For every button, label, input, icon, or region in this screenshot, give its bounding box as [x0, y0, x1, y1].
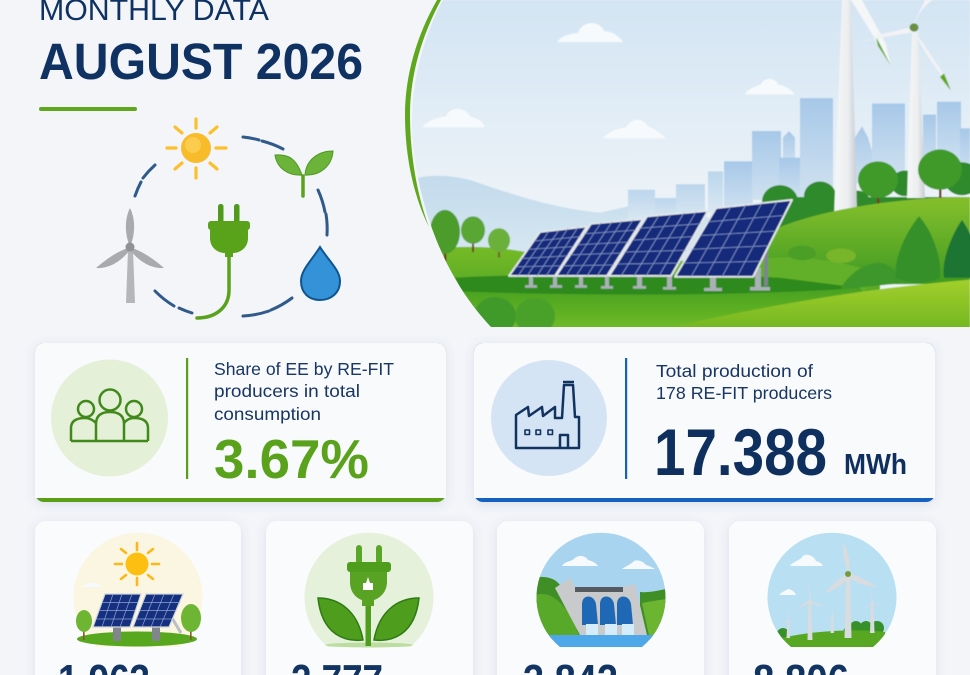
icon: factory on blue circle: [491, 360, 607, 476]
value: 17.388: [654, 415, 827, 489]
back tree band: [762, 162, 970, 234]
source card: wind: [729, 521, 936, 675]
card text: [656, 361, 832, 403]
ground shadow under panels: [455, 274, 860, 295]
middle meadow: [462, 288, 890, 328]
source card: hydro: [497, 521, 704, 675]
icon: solar panels: [74, 533, 203, 647]
card text: Total production of: [656, 361, 813, 381]
title: august 2026: AUGUST 2026: [39, 33, 363, 90]
card text: [214, 359, 394, 424]
clouds: [422, 23, 795, 138]
renewable energy cycle icon group: [96, 119, 340, 318]
icon: plug: [197, 204, 250, 318]
icon: sun: [167, 119, 226, 178]
front lime hill: [670, 280, 970, 328]
green arc edge: [405, 0, 441, 227]
sky: [412, 0, 970, 290]
card text: 178 RE-FIT producers: [656, 383, 832, 403]
icon: plug with leaves: [304, 533, 434, 648]
unit: MWh: [844, 449, 907, 481]
stat card: total production: [474, 343, 935, 502]
hero illustration: renewable landscape: [405, 0, 970, 336]
icon: hydro dam: [536, 532, 666, 647]
city skyline: [628, 98, 970, 221]
title underline: [39, 107, 137, 111]
left trees: [430, 210, 510, 261]
icon: water drop: [301, 247, 340, 300]
card text: Share of EE by RE-FIT: [214, 359, 394, 379]
source card: solar: [35, 521, 241, 675]
back green hill: [760, 197, 970, 284]
card text: consumption: [214, 404, 321, 424]
foreground pine trees: [896, 216, 970, 283]
mid hill band: [762, 258, 864, 290]
icon: wind turbine: [96, 208, 164, 303]
dashed circle: [135, 137, 327, 316]
right trees: [858, 149, 962, 205]
stat card: share of EE: [35, 343, 446, 502]
wind turbines: [834, 0, 951, 216]
solar panels: [509, 200, 792, 291]
icon: wind farm: [765, 530, 901, 650]
left field: [442, 246, 881, 296]
panel supports: [525, 248, 770, 291]
source card: biomass plug: [266, 521, 473, 675]
bushes: [476, 246, 895, 327]
distant mountains: [418, 176, 709, 261]
icon: people on green circle: [51, 360, 168, 476]
card text: producers in total: [214, 381, 360, 401]
icon: sprout: [275, 151, 333, 196]
value: 3.67%: [214, 428, 369, 490]
